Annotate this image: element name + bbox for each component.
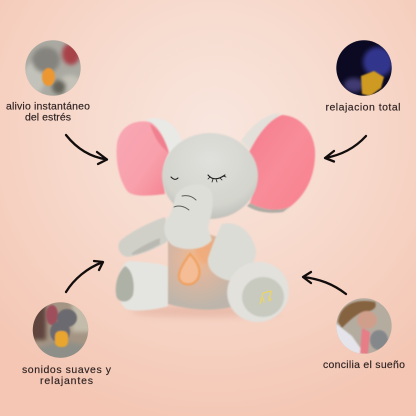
label: sonidos suaves: relajantes: [40, 375, 93, 387]
right arm: [208, 223, 256, 281]
glow flame: [179, 254, 199, 284]
photo: relajacion total: [336, 40, 393, 96]
arrow: top left: [66, 135, 107, 164]
arrow: bottom left: [66, 261, 103, 292]
shadow: [130, 305, 280, 317]
label: alivio instantaneo: del estrés: [25, 112, 71, 124]
rear left arm: [118, 217, 172, 257]
glow: [195, 236, 219, 264]
photo: concilia el sueno: [334, 298, 392, 356]
left leg: [116, 261, 170, 310]
arrow: top right: [325, 136, 366, 162]
label: alivio instantaneo: [6, 100, 90, 124]
label: concilia el sueno: concilia el sueño: [323, 359, 405, 371]
label: alivio instantaneo: alivio instantáneo: [6, 100, 90, 112]
foot: [219, 253, 297, 331]
body: [168, 234, 235, 310]
elephant plush: [116, 113, 315, 331]
label: sonidos suaves: [22, 364, 112, 387]
head: [162, 133, 258, 219]
left ear: [116, 118, 182, 196]
right ear: [241, 113, 315, 213]
trunk: [164, 184, 213, 249]
photo: alivio instantaneo: [23, 40, 81, 96]
label: relajacion total: relajacion total: [326, 102, 400, 114]
photo: sonidos suaves: [32, 302, 88, 358]
eyes: [171, 175, 225, 179]
label: sonidos suaves: sonidos suaves y: [22, 364, 112, 376]
trunk creases: [174, 196, 196, 210]
music note: [260, 291, 271, 304]
arrow: bottom right: [303, 272, 346, 294]
